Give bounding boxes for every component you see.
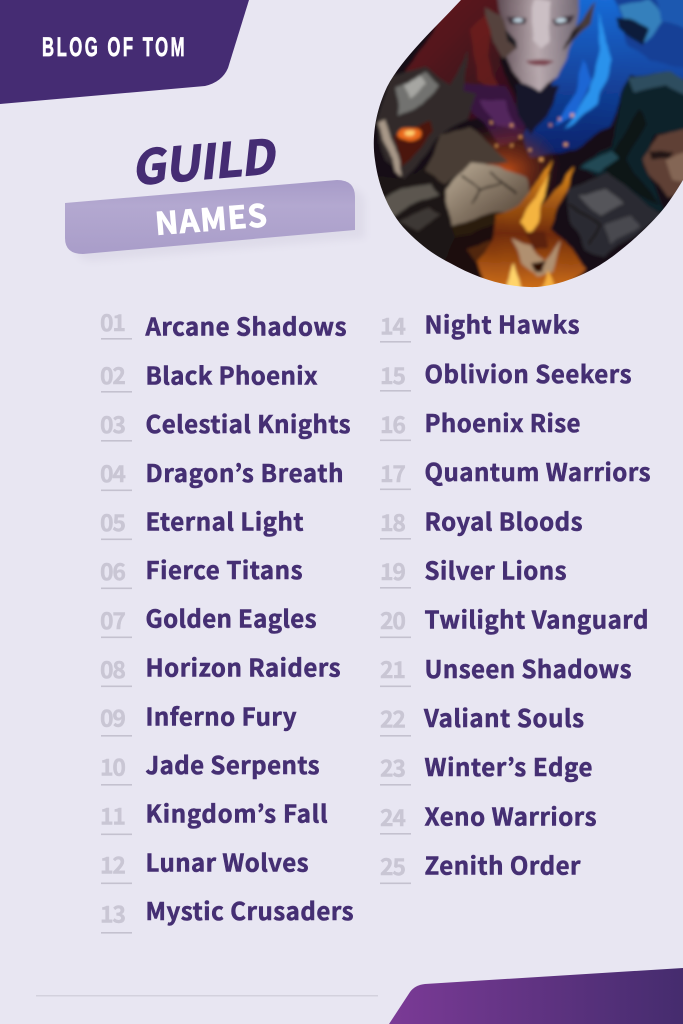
ears and face marks xyxy=(484,8,516,58)
title band shadow xyxy=(75,188,365,261)
title word: Guild: GUILD xyxy=(131,118,281,199)
row 07: 07 xyxy=(100,602,126,636)
row 23: 23 xyxy=(380,750,406,784)
knight shoulder armour xyxy=(445,162,530,226)
row 04: 04 xyxy=(100,455,126,489)
row 19: 19 xyxy=(380,553,406,587)
row 18: Royal Bloods xyxy=(424,502,583,538)
row 17: 17 xyxy=(380,455,406,489)
blue monster xyxy=(614,0,683,68)
orange glow xyxy=(479,126,558,194)
row 06: Fierce Titans xyxy=(146,551,303,586)
row 17: Quantum Warriors xyxy=(424,453,651,488)
row 14: Night Hawks xyxy=(424,306,580,340)
row 09: Inferno Fury xyxy=(146,698,297,732)
list column two: names 14 to 25 xyxy=(380,306,651,884)
hooded man's face xyxy=(644,128,683,198)
row 22: Valiant Souls xyxy=(423,699,584,734)
row 10: Jade Serpents xyxy=(146,746,320,781)
row 20: 20 xyxy=(380,602,406,636)
row 18: 18 xyxy=(380,504,406,538)
row 16: 16 xyxy=(380,406,406,440)
row 12: 12 xyxy=(100,846,126,880)
row 01: 01 xyxy=(100,304,126,338)
row 21: 21 xyxy=(380,651,406,685)
row 12: Lunar Wolves xyxy=(146,844,309,878)
row 03: 03 xyxy=(100,406,126,440)
row 15: Oblivion Seekers xyxy=(424,355,632,390)
red hair xyxy=(395,0,520,120)
row 16: Phoenix Rise xyxy=(424,404,580,439)
row 24: Xeno Warriors xyxy=(424,798,597,832)
row 24: 24 xyxy=(380,799,406,833)
row 19: Silver Lions xyxy=(424,552,567,586)
row 04: Dragon’s Breath xyxy=(146,454,344,489)
row 22: 22 xyxy=(380,700,406,734)
row 05: 05 xyxy=(100,504,126,538)
row 10: 10 xyxy=(100,748,126,782)
row 25: Zenith Order xyxy=(424,846,581,882)
title word: Names: NAMES xyxy=(153,190,268,244)
row 08: Horizon Raiders xyxy=(146,648,341,684)
knight helmet xyxy=(376,50,476,178)
knight visor glow xyxy=(394,122,434,168)
header banner xyxy=(0,0,249,104)
row 03: Celestial Knights xyxy=(146,405,351,440)
footer rule xyxy=(36,995,378,996)
woman's face xyxy=(497,0,580,90)
dark chest xyxy=(515,85,560,135)
title: Guild Names xyxy=(65,118,365,261)
footer banner xyxy=(389,968,683,1024)
row 11: Kingdom’s Fall xyxy=(146,794,328,830)
row 07: Golden Eagles xyxy=(146,600,317,634)
sparks xyxy=(489,114,573,162)
row 09: 09 xyxy=(100,700,126,734)
knight body xyxy=(378,162,456,260)
row 25: 25 xyxy=(380,848,406,882)
row 12 xyxy=(100,844,309,884)
row 02: 02 xyxy=(100,357,126,391)
title band xyxy=(65,180,355,254)
row 05: Eternal Light xyxy=(146,502,304,538)
row 06: 06 xyxy=(100,553,126,587)
row 11: 11 xyxy=(100,798,126,832)
lower left xyxy=(445,226,494,278)
row 14: 14 xyxy=(380,308,406,342)
illustration: fantasy guild heroes in blob mask xyxy=(360,0,683,295)
row 11 xyxy=(100,794,328,835)
flame creature xyxy=(478,160,585,295)
row 13 xyxy=(100,892,354,934)
row 15: 15 xyxy=(380,357,406,391)
row 20: Twilight Vanguard xyxy=(424,600,648,636)
row 21: Unseen Shadows xyxy=(424,650,632,685)
brand name: Blog of Tom: BLOG OF TOM xyxy=(42,32,185,62)
row 13: 13 xyxy=(100,896,126,930)
row 01: Arcane Shadows xyxy=(144,308,347,342)
row 09 xyxy=(100,698,297,737)
purple cloak xyxy=(455,85,525,145)
row 13: Mystic Crusaders xyxy=(146,892,354,927)
right armour xyxy=(565,172,662,258)
row 02: Black Phoenix xyxy=(146,356,318,392)
row 23: Winter’s Edge xyxy=(424,748,592,783)
blue flame hair xyxy=(522,0,683,158)
row 08: 08 xyxy=(100,651,126,685)
list column one: names 01 to 13 xyxy=(100,304,354,934)
hood xyxy=(577,70,683,212)
